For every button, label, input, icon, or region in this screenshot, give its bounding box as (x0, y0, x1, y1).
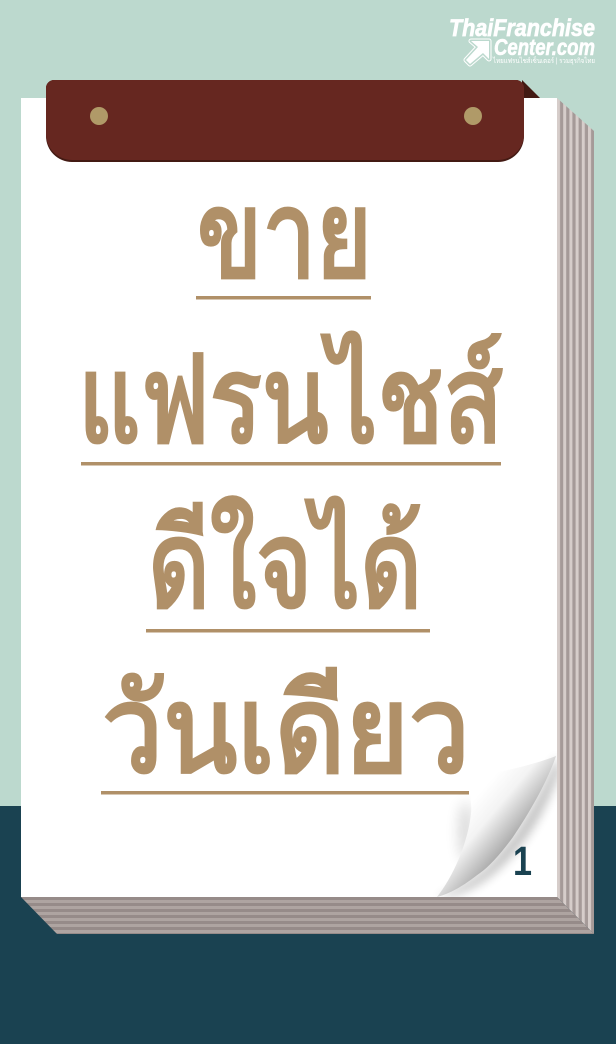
page number: 1 (513, 838, 532, 884)
page curl (437, 756, 560, 897)
binding header (46, 80, 540, 162)
curl shadow on page, left of flap (459, 802, 473, 862)
rivet left (90, 107, 108, 125)
title line 2: แฟรนไชส์ (78, 331, 503, 469)
title line 3: ดีใจได้ (148, 495, 422, 634)
title line 4: วันเดียว (102, 664, 470, 799)
logo: ThaiFranchise (449, 15, 595, 42)
logo arrow icon (466, 41, 489, 64)
title line 1: ขาย (197, 169, 372, 304)
title (78, 169, 503, 799)
curl flap (437, 756, 556, 897)
rivet right (464, 107, 482, 125)
page stack: bottom edge (21, 897, 594, 934)
page stack: right edge (557, 98, 594, 934)
calendar pad (21, 98, 594, 934)
white page (21, 98, 557, 897)
logo tagline: ไทยแฟรนไชส์เซ็นเตอร์ | รวมธุรกิจไทย (492, 56, 595, 65)
logo: Center.com (494, 34, 595, 60)
logo (449, 15, 595, 65)
curl shadow on page, right of fold (437, 756, 560, 897)
